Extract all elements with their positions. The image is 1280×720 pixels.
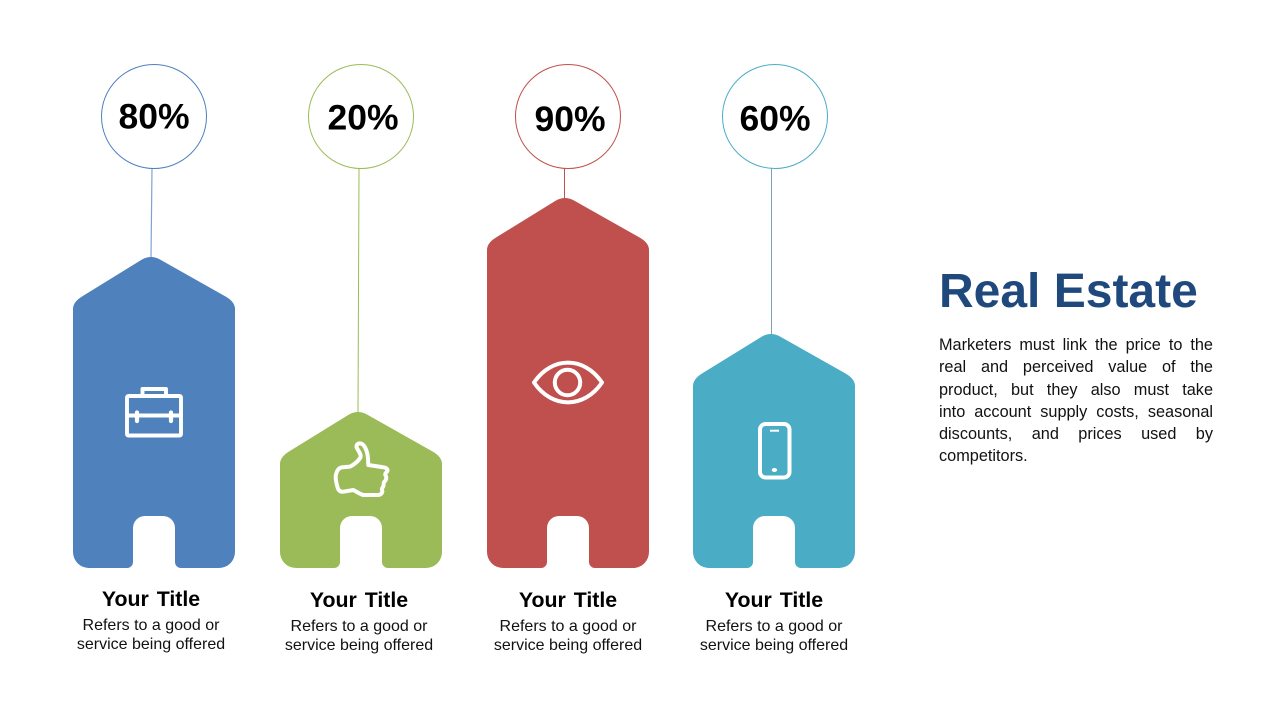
caption: column 4: service being offered	[700, 637, 848, 654]
body text	[939, 336, 1213, 465]
icon: eye	[534, 363, 602, 402]
caption: column 4	[700, 588, 848, 654]
house: green	[280, 412, 442, 568]
caption: column 4: Your Title	[725, 588, 823, 612]
percent badge: 90%: 90%	[534, 99, 606, 139]
caption: column 3: Refers to a good or	[500, 618, 636, 635]
connector: blue	[151, 168, 152, 258]
caption: column 3: service being offered	[494, 637, 642, 654]
body text: Marketers must link the price to the	[939, 336, 1213, 354]
caption: column 2	[285, 588, 433, 654]
icon: briefcase	[127, 389, 181, 436]
caption: column 1: service being offered	[77, 636, 225, 653]
caption: column 4: Refers to a good or	[706, 618, 842, 635]
percent badge: 60%	[722, 64, 828, 168]
percent badge: 60%: 60%	[739, 98, 811, 138]
house: blue	[73, 257, 235, 568]
body text: discounts, and prices used by	[939, 425, 1213, 443]
body text: competitors.	[939, 447, 1028, 465]
percent badge: 20%: 20%	[327, 98, 399, 138]
caption: column 2: Your Title	[310, 588, 408, 612]
caption: column 1: Your Title	[102, 587, 200, 611]
house: teal	[693, 334, 855, 568]
caption: column 1	[77, 587, 225, 653]
body text: real and perceived value of the	[939, 358, 1213, 376]
percent badge: 90%	[516, 64, 620, 168]
percent badge: 20%	[308, 64, 414, 168]
caption: column 3	[494, 588, 642, 654]
percent badge: 80%: 80%	[118, 96, 190, 136]
house: red	[487, 198, 649, 568]
caption: column 2: service being offered	[285, 637, 433, 654]
icon: thumbs up	[336, 443, 388, 495]
connector: red	[564, 168, 566, 199]
caption: column 1: Refers to a good or	[83, 617, 219, 634]
percent badge: 80%	[102, 64, 206, 168]
caption: column 3: Your Title	[519, 588, 617, 612]
heading: Real Estate	[939, 265, 1198, 318]
body text: product, but they also must take	[939, 381, 1213, 399]
connector: teal	[770, 168, 772, 335]
icon: smartphone	[760, 424, 790, 478]
caption: column 2: Refers to a good or	[291, 618, 427, 635]
body text: into account supply costs, seasonal	[939, 403, 1213, 421]
connector: green	[358, 168, 359, 413]
